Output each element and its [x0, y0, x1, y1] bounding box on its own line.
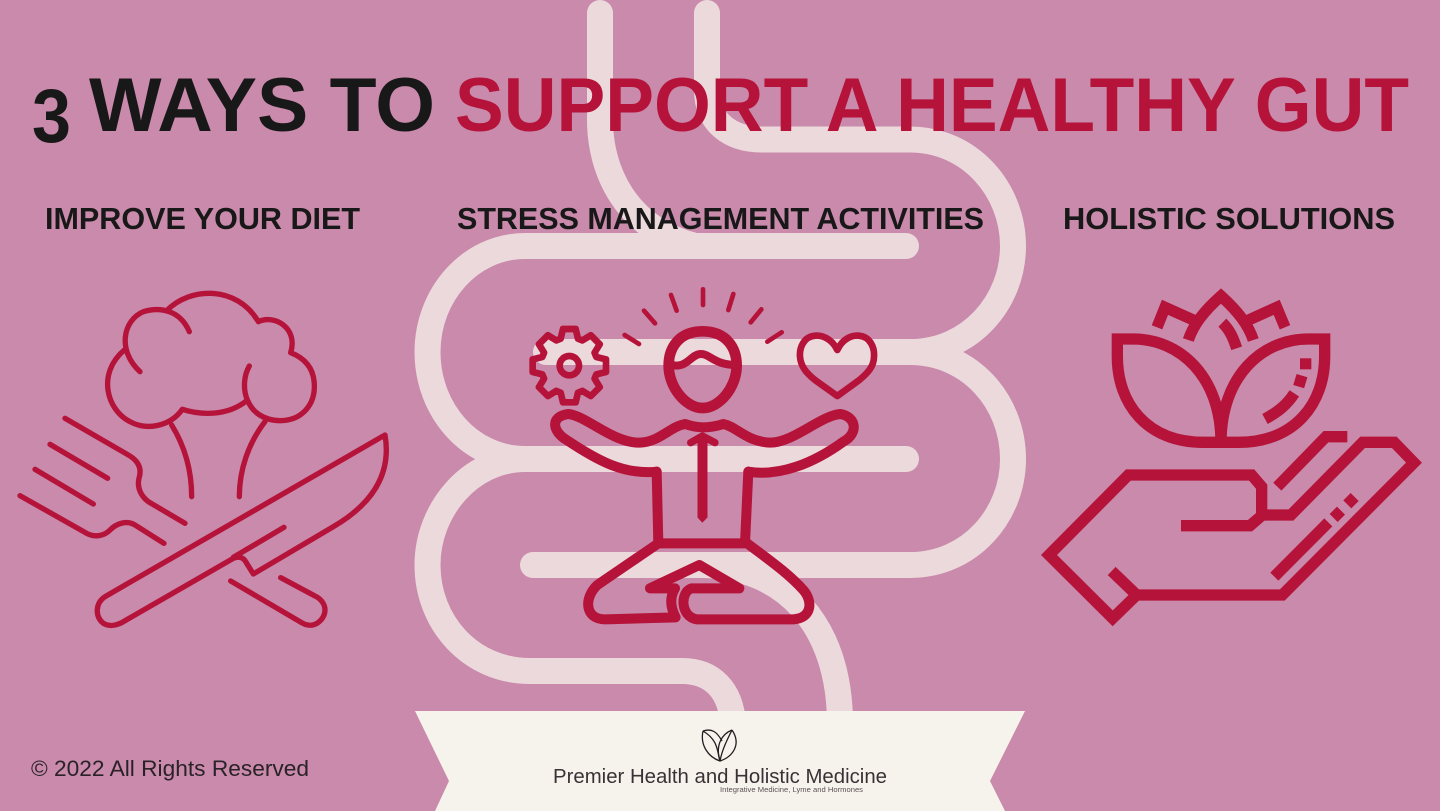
brand tagline: Integrative Medicine, Lyme and Hormones: [720, 785, 863, 794]
brand name: Premier Health and Holistic Medicine: [553, 766, 887, 788]
hand: [1277, 437, 1347, 487]
lotus leaves: [1117, 339, 1221, 442]
title: [32, 63, 1409, 159]
footer ribbon: [415, 711, 1025, 811]
head: [669, 331, 737, 408]
rays: [625, 289, 782, 344]
icon: leaf logo: [702, 730, 736, 761]
heart: [800, 336, 874, 396]
intestine illustration: [428, 13, 1013, 724]
copyright: © 2022 All Rights Reserved: [31, 756, 309, 781]
leaf highlights: [1289, 358, 1323, 369]
icon: hand holding lotus: [1049, 296, 1414, 618]
arms and shoulders: [555, 414, 854, 473]
gear: [533, 329, 606, 402]
icon: broccoli with fork and knife: [20, 293, 386, 625]
tie: [698, 440, 707, 522]
title: 3: [32, 74, 71, 159]
lotus petals: [1157, 307, 1193, 327]
title: SUPPORT A HEALTHY GUT: [455, 63, 1409, 148]
heading: improve your diet: IMPROVE YOUR DIET: [45, 201, 360, 236]
torso: [657, 472, 748, 543]
heading: stress management activities: STRESS MANAGEMENT ACTIVITIES: [457, 201, 984, 236]
legs: [588, 542, 809, 619]
heading: holistic solutions: HOLISTIC SOLUTIONS: [1063, 201, 1395, 236]
title: WAYS TO: [89, 63, 435, 148]
hair: [669, 354, 737, 366]
icon: meditating person with gear and heart: [533, 289, 874, 619]
